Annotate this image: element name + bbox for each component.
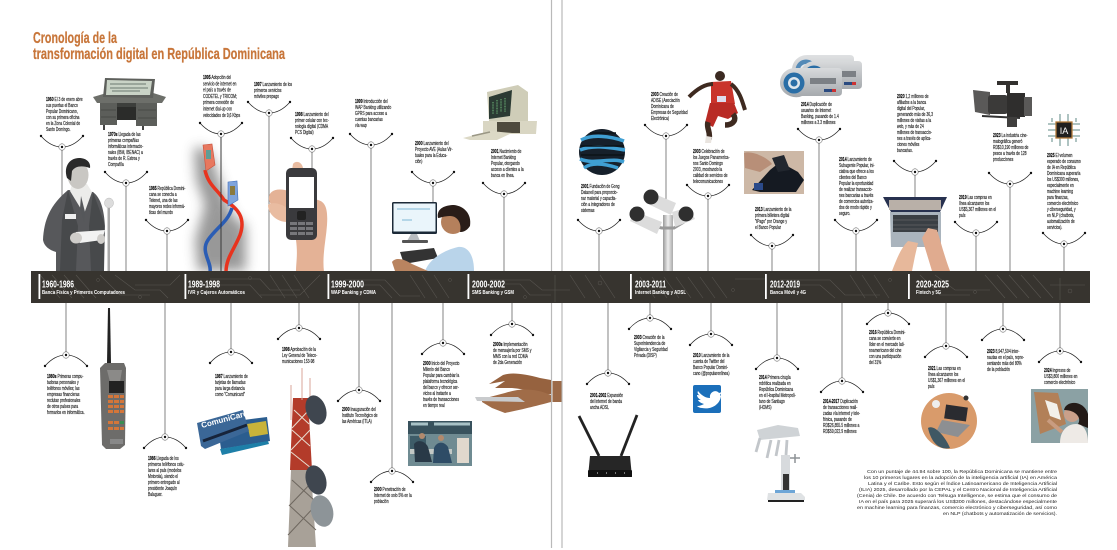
event: 1970s: 1970s Llegada de las bbox=[108, 131, 141, 137]
event: 2003 Panamericanos bbox=[686, 148, 730, 199]
period: 1989-1998: IVR y Cajeros Automáticos bbox=[188, 290, 245, 296]
event: 2014-2017 bbox=[820, 378, 864, 434]
event: 2000 internet penetration: población bbox=[374, 498, 389, 504]
event: 2021 bbox=[924, 343, 968, 389]
image: security cameras bbox=[630, 190, 695, 272]
event: 2023 cine: matográfica generó bbox=[993, 138, 1023, 144]
icon: AI chip bbox=[1048, 114, 1080, 146]
event: 2000 Proyecto Milenio: en tiempo real bbox=[423, 402, 445, 408]
event: 2003 Superintendencia bbox=[628, 315, 672, 358]
event: 2020: millones de visitas a la bbox=[897, 117, 931, 123]
event: 2020: nes a través de aplica- bbox=[897, 135, 932, 141]
image: laptop with hands bbox=[883, 197, 950, 271]
event: 2000s SMS: de 2da Generación bbox=[493, 359, 522, 365]
image: cinema camera bbox=[973, 81, 1032, 127]
event: 1985: mayores redes informá- bbox=[149, 203, 185, 209]
event: 2025: especialmente en bbox=[1047, 182, 1074, 188]
event: 1980s: tadoras personales y bbox=[47, 379, 79, 385]
event: 2014 subagente: dos de modo rápido y bbox=[839, 204, 872, 210]
event: 1995: CODETEL y TRICOM; bbox=[203, 93, 237, 99]
event: 2003 Superintendencia: 2003 Creación de la bbox=[634, 334, 665, 340]
period: 1999-2000: WAP Banking y CDMA bbox=[331, 290, 377, 296]
event: 2014-2017: RD$59,022.9 millones bbox=[823, 428, 857, 434]
event: 1985: Telenet, una de las bbox=[149, 197, 178, 203]
event: 2019: 2019 Las compras en bbox=[959, 194, 992, 200]
title: Cronología de la bbox=[33, 30, 117, 47]
event: 2010: Banco Popular Domini- bbox=[693, 364, 728, 370]
event: 1980s: reclutan profesionales bbox=[47, 397, 81, 403]
image: boy at computer bbox=[392, 202, 474, 271]
period: 2012-2019 bbox=[765, 274, 806, 299]
period: 1960-1986: Banca Física y Primeros Computadores bbox=[42, 290, 125, 296]
event: 2014 robotic surgery: República Dominicana bbox=[759, 386, 793, 392]
event: 2016: noamericano del cine bbox=[869, 347, 902, 353]
event: 2001-2002 bbox=[586, 370, 630, 410]
period: 1989-1998 bbox=[184, 274, 245, 299]
title: transformación digital en República Dominicana bbox=[33, 46, 285, 63]
event: 1995: velocidades de 9,6 Kbps bbox=[203, 112, 241, 118]
event: 2000 Proyecto Milenio: Popular para cambiar la bbox=[423, 372, 459, 378]
event: 2021: país bbox=[928, 383, 935, 389]
event: 2000 Proyecto Milenio: del banco y ofrecer ser- bbox=[423, 384, 459, 390]
event: 1986: primeros teléfonos celu- bbox=[148, 461, 185, 467]
image: hands with smartphone bbox=[475, 374, 562, 413]
event: 2000 AVE bbox=[411, 140, 455, 186]
closing paragraph: Latina y el Caribe. Esto según el Índice Latinoamericano de Inteligencia Artificial bbox=[868, 480, 1057, 486]
event: 2023 internautas bbox=[981, 326, 1025, 372]
event: 2023 cine: RD$10,190 millones de bbox=[993, 144, 1029, 150]
event: 2000 internet penetration bbox=[370, 468, 414, 504]
event: 1999 bbox=[349, 98, 393, 148]
event: 2020: 2020 1,2 millones de bbox=[897, 93, 928, 99]
event: 2000 AVE: Proyecto AVE (Aulas Vir- bbox=[415, 146, 453, 152]
event: 2000 ITLA: 2000 Inauguración del bbox=[342, 406, 376, 412]
event: 2019: US$5,367 millones en el bbox=[959, 206, 996, 212]
event: 1970s: través de R. Estrea y bbox=[108, 155, 140, 161]
event: 2014 usuarios: millones a 3.3 millones bbox=[801, 119, 836, 125]
event: 2003 ADISE: Dominicana de bbox=[651, 103, 674, 109]
event: 2014-2017: de transacciones reali- bbox=[823, 404, 858, 410]
event: 2014 subagente: de comercios autoriza- bbox=[839, 198, 874, 204]
event: 2001 Gong Dataneil: ción a integradores de bbox=[581, 201, 615, 207]
event: 1985 bbox=[145, 185, 189, 234]
event: 2023 internautas: nautas en el país, repre- bbox=[987, 354, 1024, 360]
event: 2001 Gong Dataneil bbox=[577, 183, 621, 234]
event: 2020 bbox=[893, 93, 937, 175]
event: 2025: y ciberseguridad, y bbox=[1047, 206, 1076, 212]
event: 2001 Gong Dataneil: sistemas bbox=[581, 207, 595, 213]
event: 2014 robotic surgery: 2014 Primera cirugía bbox=[759, 374, 791, 380]
period: 2003-2011: Internet Banking y ADSL bbox=[635, 290, 686, 296]
period: 1999-2000: 1999-2000 bbox=[331, 280, 364, 290]
event: 2003 ADISE: ADISE (Asociación bbox=[651, 97, 680, 103]
event: 2001 Gong Dataneil: nar material y capacita- bbox=[581, 195, 617, 201]
event: 2000 Proyecto Milenio: Milenio del Banco bbox=[423, 366, 450, 372]
event: 2014 usuarios bbox=[797, 101, 841, 143]
event: 1985: cana se conecta a bbox=[149, 191, 177, 197]
event: 2024: comercio electrónico bbox=[1044, 379, 1076, 385]
closing paragraph: IA en el país para 2025 superará los US$300 millones, destacándose especialmente bbox=[859, 499, 1057, 504]
event: 2001 internet banking bbox=[482, 148, 526, 197]
event: 2003 ADISE bbox=[644, 91, 688, 139]
event: 2001 Gong Dataneil: 2001 Fundación de Gong bbox=[581, 183, 620, 189]
event: 2020: millones de transaccio- bbox=[897, 129, 932, 135]
image: card terminal photo bbox=[744, 151, 804, 194]
event: 1998 telecom law: 1998 Aprobación de la bbox=[282, 346, 316, 352]
event: 2000 Proyecto Milenio: vicios al instante a bbox=[423, 390, 451, 396]
event: 1986: 1986 Llegada de los bbox=[148, 455, 179, 461]
image: desk computer bbox=[93, 78, 166, 130]
closing paragraph: Con un puntaje de 44.94 sobre 100, la República Dominicana se mantiene entre bbox=[867, 469, 1057, 474]
event: 2023 internautas: de la población bbox=[987, 366, 1010, 372]
event: 2000s SMS bbox=[490, 321, 534, 365]
period: 2020-2025: 2020-2025 bbox=[916, 280, 949, 290]
event: 2020: digital del Popular, bbox=[897, 105, 925, 111]
event: 2024 bbox=[1038, 348, 1082, 385]
image: control room photo bbox=[408, 421, 472, 466]
period: 2020-2025 bbox=[908, 274, 949, 299]
image: online shopping laptop photo bbox=[921, 393, 977, 449]
event: 2001-2002: ancha ADSL bbox=[590, 404, 609, 410]
event: 2000 Proyecto Milenio: través de transacciones bbox=[423, 396, 459, 402]
event: 2003 ADISE: 2003 Creación de bbox=[651, 91, 678, 97]
event: 1986: Balaguer. bbox=[148, 491, 162, 497]
event: 1985: ticas del mundo bbox=[149, 209, 173, 215]
closing paragraph: los 10 primeros lugares en la adopción de la inteligencia artificial (IA) en América bbox=[864, 475, 1057, 480]
event: 1995: primera conexión de bbox=[203, 99, 234, 105]
event: 2001 internet banking: Internet Banking bbox=[491, 154, 516, 160]
event: 1998 cellular: 1998 Lanzamiento del bbox=[295, 111, 329, 117]
timeline band bbox=[31, 271, 1090, 303]
event: 2000 ITLA bbox=[337, 387, 381, 424]
event: 1960: en la Zona Colonial de bbox=[46, 120, 80, 126]
event: 2025: para finanzas, bbox=[1047, 194, 1068, 200]
event: 1960: sus puertas el Banco bbox=[46, 102, 78, 108]
closing paragraph: (Cenia) de Chile. De acuerdo con Telsuga Intelligence, se estima que el consumo de bbox=[857, 493, 1057, 498]
closing paragraph bbox=[857, 469, 1057, 516]
event: 2010: cano (@popularenlinea) bbox=[693, 370, 730, 376]
event: 2019 bbox=[954, 194, 998, 236]
event: 1995: 1995 Adopción del bbox=[203, 74, 231, 80]
event: 1995: internet dial-up con bbox=[203, 106, 232, 112]
period: 2000-2002: 2000-2002 bbox=[472, 280, 505, 290]
event: 2016: con una participación bbox=[869, 353, 902, 359]
event: 1987: tarjetas de llamadas bbox=[215, 379, 246, 385]
event: 1998 telecom law: municaciones 153-98 bbox=[282, 358, 315, 364]
event: 2000 ITLA: las Américas (ITLA) bbox=[342, 418, 372, 424]
event: 1998 cellular: PCS Digital) bbox=[295, 129, 314, 135]
event: 2014 subagente: seguro. bbox=[839, 210, 850, 216]
event: 1970s: primeras compañías bbox=[108, 137, 139, 143]
event: 2003 Panamericanos: 2003 Celebración de bbox=[693, 148, 724, 154]
event: 1995: servicio de internet en bbox=[203, 80, 237, 87]
event: 1999: WAP Banking utilizando bbox=[355, 104, 391, 110]
event: 1999: GPRS para acceso a bbox=[355, 110, 387, 116]
event: 2014-2017: zadas vía internet y tele- bbox=[823, 410, 860, 416]
event: 2014 usuarios: 2014 Duplicación de bbox=[801, 101, 832, 107]
period: 2000-2002 bbox=[468, 274, 514, 299]
image: retro desktop PC bbox=[463, 85, 537, 140]
event: 1960: 1960 El 3 de enero abre bbox=[46, 96, 83, 102]
event: 2025: de IA en República bbox=[1047, 164, 1076, 170]
event: 2000 Proyecto Milenio: plataforma tecnológica bbox=[423, 378, 458, 384]
event: 1960: con su primera oficina bbox=[46, 114, 80, 120]
event: 1987 bbox=[209, 349, 253, 397]
event: 2023 cine bbox=[988, 132, 1032, 187]
period: 2012-2019: Banca Móvil y 4G bbox=[770, 290, 806, 296]
event: 2003 Panamericanos: nos Santo Domingo bbox=[693, 160, 723, 166]
event: 2000 AVE: 2000 Lanzamiento del bbox=[415, 140, 449, 146]
event: 2014 subagente: clientes del Banco bbox=[839, 174, 867, 180]
event: 2025: esperado de consumo bbox=[1047, 158, 1081, 164]
event: 1986: primero entregado al bbox=[148, 479, 179, 485]
closing paragraph: (ILIA) 2025, desarrollado por la CEPAL y el Centro Nacional de Inteligencia Artificial bbox=[859, 487, 1057, 492]
event: 2010: cuenta de Twitter del bbox=[693, 358, 724, 364]
event: 2003 ADISE: Empresas de Seguridad bbox=[651, 109, 688, 115]
event: 2025: servicios). bbox=[1047, 224, 1062, 230]
period: 2003-2011 bbox=[630, 274, 686, 299]
event: 1998 cellular: primer celular con tec- bbox=[295, 117, 329, 123]
image: wifi router bbox=[579, 415, 637, 477]
period: 2012-2019: 2012-2019 bbox=[770, 280, 800, 290]
event: 1986: presidente Joaquín bbox=[148, 485, 177, 491]
event: 1970s bbox=[104, 131, 148, 186]
event: 2010: 2010 Lanzamiento de la bbox=[693, 352, 729, 358]
event: 2014 subagente bbox=[834, 156, 878, 234]
event: 2014 subagente: de realizar transaccio- bbox=[839, 186, 873, 192]
event: 2016 bbox=[866, 310, 910, 365]
period: 1960-1986 bbox=[38, 274, 125, 299]
event: 2014 subagente: Subagente Popular, ini- bbox=[839, 162, 875, 168]
event: 2021: 2021 Las compras en bbox=[928, 365, 961, 371]
event: 2014 subagente: nes bancarias a través bbox=[839, 192, 874, 198]
event: 1960: Popular Dominicano, bbox=[46, 108, 78, 114]
event: 2019: país bbox=[959, 212, 966, 218]
event: 2025: automatización de bbox=[1047, 218, 1075, 224]
event: 2001 internet banking: banca en línea. bbox=[491, 172, 514, 178]
event: 2000s SMS: MMS con la red CDMA bbox=[493, 353, 529, 359]
event: 2014 subagente: 2014 Lanzamiento de bbox=[839, 156, 872, 162]
event: 2021: línea alcanzaron los bbox=[928, 371, 959, 377]
event: 1960: Santo Domingo. bbox=[46, 126, 70, 132]
event: 2003 Panamericanos: telecomunicaciones bbox=[693, 178, 723, 184]
period: 1960-1986: 1960-1986 bbox=[42, 280, 74, 290]
event: 2000 internet penetration: Internet de solo 5% en la bbox=[374, 492, 412, 498]
icon: AI chip: IA bbox=[1060, 126, 1068, 136]
event: 2014-2017: fónica, pasando de bbox=[823, 416, 852, 422]
event: 2014 robotic surgery: tano de Santiago bbox=[759, 398, 785, 404]
event: 2001-2002: 2001-2002 Expansión bbox=[590, 392, 623, 398]
image: surgical robot bbox=[756, 425, 805, 502]
event: 1995: el país a través de bbox=[203, 87, 231, 93]
event: 1999: cuentas bancarias bbox=[355, 116, 383, 122]
event: 2003 Panamericanos: calidad de servicios de bbox=[693, 172, 728, 178]
event: 2000 AVE: tuales para la Educa- bbox=[415, 152, 448, 158]
event: 1997 bbox=[247, 81, 293, 116]
event: 2014 robotic surgery bbox=[755, 355, 799, 410]
event: 2024: 2024 Ingresos de bbox=[1044, 367, 1070, 373]
event: 1997: primeros servicios bbox=[254, 87, 282, 93]
event: 1995 bbox=[199, 74, 243, 137]
event: 1970s: Compañía bbox=[108, 161, 124, 167]
event: 1980s: formarlos en informática. bbox=[47, 409, 85, 415]
event: 1980s: empresas financieras bbox=[47, 391, 80, 397]
image: Comunicard phone cards: ComuniCard bbox=[200, 409, 249, 430]
event: 2001 internet banking: Popular, otorgando bbox=[491, 160, 520, 166]
event: 2020: generando más de 36,3 bbox=[897, 111, 933, 117]
event: 1986: lares al país (modelos bbox=[148, 467, 182, 473]
event: 2016: del 31% bbox=[869, 359, 881, 365]
event: 2023 internautas: 2023 8,947,504 inter- bbox=[987, 348, 1019, 354]
event: 2020: web, y más de 24 bbox=[897, 123, 924, 129]
event: 1998 telecom law: Ley General de Teleco- bbox=[282, 352, 318, 358]
event: 2003 Superintendencia: Superintendencia de bbox=[634, 340, 666, 346]
event: 2019: línea alcanzaron los bbox=[959, 200, 990, 206]
connector stems bbox=[62, 113, 1064, 471]
event: 1999: 1999 Introducción del bbox=[355, 98, 388, 104]
event: 2014 robotic surgery: robótica realizada en bbox=[759, 380, 791, 386]
event: 2016: 2016 República Domini- bbox=[869, 329, 905, 335]
event: 1970s: informáticas internacio- bbox=[108, 143, 144, 149]
event: 1999: vía wap bbox=[355, 122, 367, 128]
event: 2024: US$3,800 millones en bbox=[1044, 373, 1078, 379]
image: brick phone bbox=[100, 308, 126, 449]
event: 2003 Panamericanos: 2003, mostrando la bbox=[693, 166, 722, 172]
image: hand holding mobile phone bbox=[268, 162, 327, 272]
closing paragraph: en machine learning para finanzas, comercio electrónico y ciberseguridad, así como bbox=[857, 505, 1057, 510]
event: 2013: 2013 Lanzamiento de la bbox=[755, 206, 791, 212]
event: 1980s bbox=[44, 352, 88, 415]
period: 2000-2002: SMS Banking y GSM bbox=[472, 290, 514, 296]
closing paragraph: en NLP (chatbots y automatización de servicios). bbox=[943, 511, 1057, 516]
event: 1980s: de otros países para bbox=[47, 403, 78, 409]
event: 1987: para larga distancia bbox=[215, 385, 245, 391]
event: 2025: los US$300 millones, bbox=[1047, 176, 1079, 182]
event: 2025: Dominicana superaría bbox=[1047, 170, 1081, 176]
event: 2023 internautas: sentando más del 80% bbox=[987, 360, 1022, 366]
event: 2000 AVE: ción) bbox=[415, 158, 423, 164]
event: 2003 Superintendencia: Vigilancia y Seguridad bbox=[634, 346, 668, 352]
event: 1970s: nales (IBM, IBENAC) a bbox=[108, 149, 143, 155]
event: 2000 internet penetration: 2000 Penetración de bbox=[374, 486, 405, 492]
event: 2000 Proyecto Milenio bbox=[421, 340, 465, 408]
event: 2013 bbox=[750, 206, 794, 249]
image: network cables bbox=[194, 134, 246, 272]
event: 2003 Superintendencia: Privada (DISP) bbox=[634, 352, 657, 358]
event: 2016: líder en el mercado lati- bbox=[869, 341, 905, 347]
event: 2010 bbox=[689, 331, 733, 376]
event: 2013: el Banco Popular bbox=[755, 224, 781, 230]
event: 1987: como “Comunicard” bbox=[215, 391, 245, 397]
icon: Twitter logo bbox=[693, 385, 722, 413]
event: 1980s: 1980s Primeras compu- bbox=[47, 373, 83, 379]
period: 1999-2000 bbox=[328, 274, 377, 299]
event: 1960 bbox=[40, 96, 84, 150]
image: digital hubs bbox=[780, 55, 862, 97]
event: 2003 Panamericanos: los Juegos Panamerica- bbox=[693, 154, 730, 160]
event: 1986: Motorola), siendo el bbox=[148, 473, 178, 479]
event: 2016: cana se convierte en bbox=[869, 335, 901, 341]
event: 2014 usuarios: Banking, pasando de 1.4 bbox=[801, 113, 839, 119]
event: 2021: US$1,367 millones en el bbox=[928, 377, 965, 383]
event: 1998 telecom law bbox=[277, 325, 321, 364]
event: 2003 ADISE: Electrónica) bbox=[651, 115, 669, 121]
event: 2014-2017: 2014-2017 Duplicación bbox=[823, 398, 858, 404]
event: 2000s SMS: 2000s Implementación bbox=[493, 341, 528, 347]
event: 2023 cine: pesos a través de 128 bbox=[993, 150, 1027, 156]
image: Comunicard phone cards bbox=[197, 409, 270, 455]
image: woman with parcel photo bbox=[1031, 389, 1088, 443]
event: 2000 Proyecto Milenio: 2000 Inicio del Proyecto bbox=[423, 360, 459, 366]
event: 1987: 1987 Lanzamiento de bbox=[215, 373, 248, 379]
event: 1998 cellular bbox=[290, 111, 334, 152]
event: 2001 internet banking: acceso a clientes a la bbox=[491, 166, 524, 172]
event: 2023 cine: 2023 La industria cine- bbox=[993, 132, 1028, 138]
image: telecom tower bbox=[288, 368, 337, 547]
event: 2020: bancarias. bbox=[897, 147, 913, 153]
event: 2014-2017: RD$26,855.5 millones a bbox=[823, 422, 860, 428]
event: 2025: en NLP (chatbots, bbox=[1047, 212, 1074, 218]
event: 2025: comercio electrónico bbox=[1047, 200, 1079, 206]
event: 2014 subagente: ciativa que ofrece a los bbox=[839, 168, 874, 174]
event: 2000 ITLA: Instituto Tecnológico de bbox=[342, 412, 378, 418]
event: 2013: primera billetera digital bbox=[755, 212, 789, 218]
event: 2020: ciones móviles bbox=[897, 141, 920, 147]
event: 2013: “tPago” por Orange y bbox=[755, 218, 788, 224]
event: 2025: machine learning bbox=[1047, 188, 1073, 194]
title bbox=[33, 30, 285, 63]
event: 2001 internet banking: 2001 Nacimiento de bbox=[491, 148, 521, 154]
event: 1998 cellular: nología digital (CDMA bbox=[295, 123, 329, 129]
image: sprinter bbox=[689, 71, 745, 143]
event: 2014 robotic surgery: en el Hospital Metropoli- bbox=[759, 392, 796, 398]
image: fiber optic circle bbox=[579, 129, 625, 175]
period: 2003-2011: 2003-2011 bbox=[635, 280, 666, 290]
period: 1989-1998: 1989-1998 bbox=[188, 280, 220, 290]
event: 2014 usuarios: usuarios de Internet bbox=[801, 107, 832, 113]
image: man in suit at microphone bbox=[43, 158, 114, 271]
event: 2001-2002: del internet de banda bbox=[590, 398, 622, 404]
event: 2020: afiliados a la banca bbox=[897, 99, 926, 105]
event: 2000s SMS: de mensajería por SMS y bbox=[493, 347, 532, 353]
event: 2014 subagente: Popular la oportunidad bbox=[839, 180, 874, 186]
event: 1997: móviles prepago bbox=[254, 93, 279, 99]
event: 1986 bbox=[143, 434, 187, 497]
event: 1980s: teléfonos móviles; las bbox=[47, 385, 80, 391]
event: 2025 bbox=[1042, 152, 1086, 247]
event: 2014 robotic surgery: (HOMS) bbox=[759, 404, 772, 410]
event: 1997: 1997 Lanzamiento de los bbox=[254, 81, 292, 87]
event: 1985: 1985 República Domini- bbox=[149, 185, 185, 191]
event: 2025: 2025 El volumen bbox=[1047, 152, 1072, 158]
page gutter lines bbox=[552, 0, 562, 548]
event: 2001 Gong Dataneil: Dataneil para proporcio- bbox=[581, 189, 618, 195]
event: 2023 cine: producciones bbox=[993, 156, 1014, 162]
period: 2020-2025: Fintech y 5G bbox=[916, 290, 941, 296]
